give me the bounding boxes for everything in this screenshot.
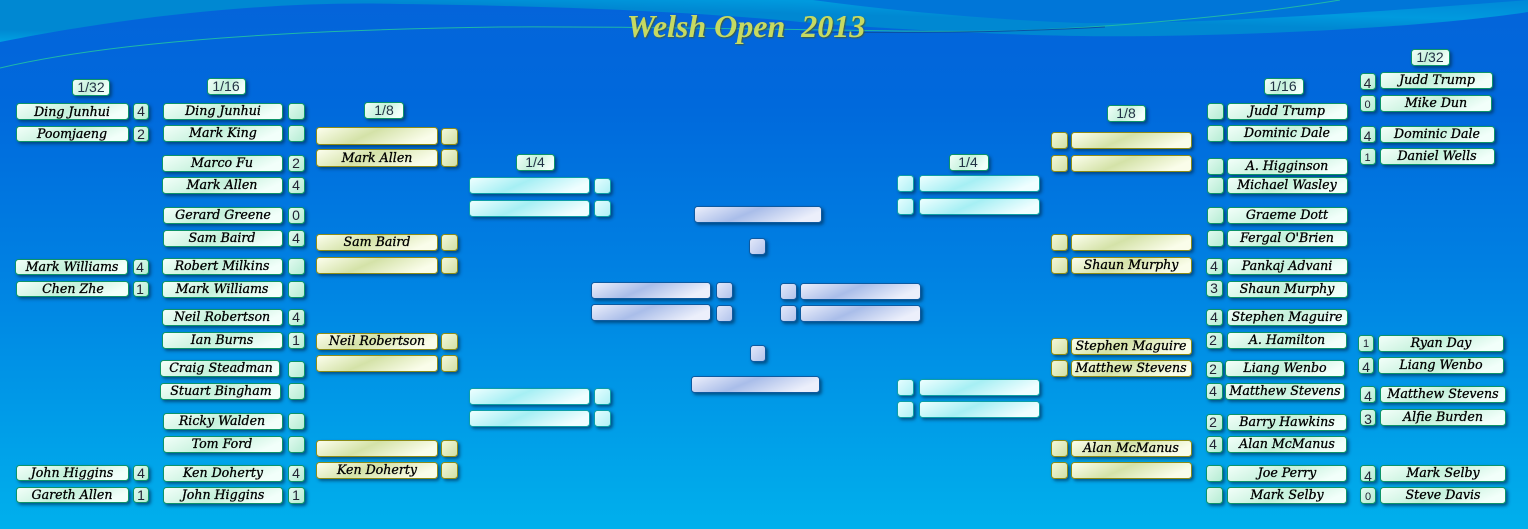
match row: Mark Allen (316, 150, 458, 166)
match row: John Higgins (16, 465, 148, 481)
match row: Matthew Stevens: Matthew Stevens (1074, 360, 1187, 375)
match row: Fergal O'Brien: Fergal O'Brien (1239, 230, 1334, 245)
match row: Ken Doherty (316, 462, 458, 478)
match row: Steve Davis: Steve Davis (1406, 487, 1481, 502)
match row: Liang Wenbo: 2 (1209, 361, 1217, 377)
panel: right 1/32 round (1358, 49, 1506, 504)
match row: Steve Davis (1360, 487, 1506, 504)
match row: Shaun Murphy: 3 (1210, 280, 1218, 296)
match row: Poomjaeng (16, 126, 148, 142)
match row: Barry Hawkins: Barry Hawkins (1238, 414, 1335, 429)
match row: Ian Burns: Ian Burns (190, 332, 254, 347)
match row: Matthew Stevens (1360, 386, 1506, 404)
match row: Ding Junhui: Ding Junhui (184, 103, 261, 118)
match row: Neil Robertson (316, 333, 458, 350)
empty slot (316, 128, 458, 144)
match row: Ian Burns (162, 332, 304, 348)
match row: Shaun Murphy: Shaun Murphy (1240, 281, 1335, 296)
match row: Mark Selby: Mark Selby (1249, 487, 1325, 502)
match row: Neil Robertson: Neil Robertson (173, 309, 270, 324)
match row: Dominic Dale: Dominic Dale (1393, 126, 1480, 141)
empty slot (470, 200, 610, 216)
heading: 1/4 right: 1/4 (958, 154, 978, 170)
match row: Liang Wenbo: 4 (1362, 359, 1370, 375)
match row: Poomjaeng: Poomjaeng (36, 126, 107, 141)
match row: Dominic Dale (1360, 126, 1494, 144)
heading: 1/8 right (1108, 105, 1146, 122)
match row: Sam Baird: 4 (292, 230, 300, 246)
empty slot (898, 198, 1040, 214)
match row: Mike Dun: Mike Dun (1404, 95, 1467, 110)
match row: Judd Trump (1208, 103, 1348, 120)
empty slot (898, 402, 1040, 418)
match row: Stuart Bingham (160, 383, 304, 400)
match row: Alan McManus: Alan McManus (1238, 436, 1335, 451)
heading: 1/32 right: 1/32 (1416, 49, 1444, 65)
semi-final right slot 2 (780, 306, 920, 322)
final score top (750, 238, 766, 254)
match row: Shaun Murphy: Shaun Murphy (1084, 257, 1179, 272)
match row: Ryan Day: Ryan Day (1410, 335, 1472, 350)
match row: Mark Williams: Mark Williams (175, 281, 269, 296)
match row: Barry Hawkins: 2 (1209, 414, 1217, 430)
match row: Alfie Burden: Alfie Burden (1402, 409, 1483, 424)
match row: Gareth Allen (16, 487, 148, 503)
match row: Mark King (164, 125, 304, 142)
match row: Joe Perry: Joe Perry (1255, 465, 1317, 480)
match row: Sam Baird (164, 230, 304, 246)
semi-final left slot 1 (592, 282, 732, 298)
match row: Chen Zhe (16, 281, 148, 297)
match row: Mark Selby: 4 (1364, 468, 1372, 484)
match row: Marco Fu: Marco Fu (190, 155, 253, 170)
match row: A. Hamilton (1206, 332, 1346, 348)
match row: Barry Hawkins (1206, 414, 1346, 430)
match row: Liang Wenbo (1206, 360, 1344, 378)
heading: 1/16 left (208, 78, 246, 94)
match row: Ding Junhui: 4 (137, 103, 145, 119)
match row: Pankaj Advani (1206, 258, 1348, 274)
panel: centre semi-finals and final (592, 206, 920, 392)
match row: Tom Ford (164, 436, 304, 452)
match row: Michael Wasley (1208, 177, 1348, 194)
match row: Neil Robertson: Neil Robertson (328, 333, 425, 348)
match row: Ian Burns: 1 (292, 332, 300, 348)
match row: Mark Allen: Mark Allen (341, 150, 412, 165)
empty slot (1052, 132, 1192, 148)
panel: left 1/4 round (470, 154, 610, 426)
match row: Judd Trump: Judd Trump (1396, 72, 1475, 87)
match row: Gerard Greene (164, 207, 304, 224)
empty slot (470, 178, 610, 194)
match row: Marco Fu (162, 155, 304, 172)
match row: Judd Trump: 4 (1364, 75, 1372, 91)
empty slot (898, 380, 1040, 396)
match row: A. Hamilton: A. Hamilton (1248, 332, 1325, 347)
panel: left 1/8 round (316, 102, 458, 478)
match row: Chen Zhe: Chen Zhe (42, 281, 104, 296)
heading: 1/8 right: 1/8 (1116, 105, 1136, 121)
match row: Ding Junhui (164, 103, 304, 120)
match row: Mike Dun (1360, 95, 1492, 112)
semi-final left slot 2 (592, 304, 732, 322)
match row: Dominic Dale: Dominic Dale (1243, 125, 1330, 140)
match row: John Higgins: 1 (292, 487, 300, 503)
match row: John Higgins: John Higgins (179, 487, 265, 502)
match row: Mark Allen (162, 177, 304, 194)
heading: 1/16 right (1264, 78, 1304, 94)
match row: Joe Perry (1206, 465, 1346, 482)
match row: Stuart Bingham: Stuart Bingham (170, 383, 272, 398)
match row: Daniel Wells: Daniel Wells (1396, 148, 1477, 163)
panel: right 1/4 round (898, 154, 1040, 418)
match row: Tom Ford: Tom Ford (192, 436, 252, 451)
match row: Mark Allen: 4 (292, 177, 300, 193)
match row: Steve Davis: 0 (1365, 491, 1371, 503)
final slot bottom (692, 376, 820, 392)
match row: Mark Selby: Mark Selby (1405, 465, 1481, 480)
empty slot (470, 410, 610, 426)
match row: Stephen Maguire: Stephen Maguire (1076, 338, 1186, 353)
match row: A. Higginson: A. Higginson (1245, 158, 1328, 173)
match row: Ding Junhui: Ding Junhui (33, 104, 110, 119)
empty slot (898, 176, 1040, 192)
match row: Mark Selby (1360, 465, 1506, 484)
match row: Sam Baird: Sam Baird (344, 234, 410, 249)
match row: Mike Dun: 0 (1364, 99, 1371, 111)
match row: Chen Zhe: 1 (136, 281, 144, 297)
match row: Shaun Murphy (1206, 280, 1348, 298)
panel: right 1/8 round (1052, 105, 1192, 478)
match row: Dominic Dale (1208, 125, 1348, 142)
empty slot (1052, 234, 1192, 250)
heading: 1/32 left: 1/32 (77, 79, 105, 95)
match row: Liang Wenbo (1358, 357, 1504, 375)
match row: Stephen Maguire: 4 (1210, 309, 1218, 325)
match row: Robert Milkins: Robert Milkins (174, 258, 270, 273)
match row: Matthew Stevens: 4 (1209, 383, 1217, 399)
heading: 1/32 right (1412, 49, 1450, 66)
match row: Daniel Wells: 1 (1364, 152, 1371, 164)
match row: John Higgins: 4 (137, 465, 145, 481)
match row: Neil Robertson: 4 (292, 309, 300, 325)
match row: Alan McManus (1052, 440, 1192, 456)
heading: 1/8 left (364, 102, 404, 118)
match row: Mark Williams: Mark Williams (25, 259, 119, 274)
match row: Liang Wenbo: Liang Wenbo (1398, 357, 1483, 372)
match row: John Higgins: John Higgins (28, 465, 114, 480)
match row: Mark Selby (1206, 487, 1346, 504)
heading: 1/4 left: 1/4 (525, 154, 545, 170)
match row: Shaun Murphy (1052, 257, 1192, 274)
match row: Alfie Burden (1360, 409, 1506, 427)
match row: Craig Steadman: Craig Steadman (169, 360, 273, 375)
match row: Mark Allen: Mark Allen (186, 177, 257, 192)
panel: left 1/16 round (160, 78, 304, 504)
empty slot (1052, 462, 1192, 478)
match row: Michael Wasley: Michael Wasley (1236, 177, 1338, 192)
match row: Ding Junhui (16, 103, 148, 120)
match row: A. Higginson (1208, 158, 1348, 174)
match row: Ricky Walden (164, 413, 304, 430)
match row: Sam Baird: Sam Baird (189, 230, 255, 245)
match row: Gerard Greene: Gerard Greene (175, 207, 271, 222)
match row: Fergal O'Brien (1208, 230, 1348, 246)
title: Welsh Open 2013 (627, 8, 865, 44)
match row: Alan McManus: Alan McManus (1082, 440, 1179, 455)
match row: A. Hamilton: 2 (1209, 332, 1217, 348)
semi-final right slot 1 (780, 284, 920, 300)
empty slot (316, 356, 458, 372)
match row: Poomjaeng: 2 (137, 126, 145, 142)
match row: Stephen Maguire: Stephen Maguire (1232, 309, 1342, 324)
heading: 1/4 left (516, 154, 554, 170)
empty slot (316, 440, 458, 456)
match row: Gareth Allen: 1 (137, 487, 145, 503)
match row: Ken Doherty (164, 465, 304, 482)
heading: 1/16 left: 1/16 (212, 78, 240, 94)
match row: Ken Doherty: Ken Doherty (182, 465, 264, 480)
match row: Ken Doherty: Ken Doherty (336, 462, 418, 477)
match row: John Higgins (164, 487, 304, 504)
match row: Mark King: Mark King (188, 125, 257, 140)
match row: Dominic Dale: 4 (1364, 128, 1372, 144)
match row: Mark Williams (16, 259, 148, 275)
match row: Graeme Dott: Graeme Dott (1246, 207, 1329, 222)
match row: Pankaj Advani: Pankaj Advani (1241, 258, 1332, 273)
match row: Gareth Allen: Gareth Allen (32, 487, 112, 502)
match row: Gerard Greene: 0 (292, 207, 300, 223)
match row: Alan McManus: 4 (1209, 436, 1217, 452)
match row: Matthew Stevens: Matthew Stevens (1228, 383, 1341, 398)
match row: Alan McManus (1206, 436, 1346, 452)
match row: Pankaj Advani: 4 (1210, 258, 1218, 274)
panel: left 1/32 round (16, 79, 148, 503)
match row: Judd Trump: Judd Trump (1246, 103, 1325, 118)
match row: Mark Williams (162, 281, 304, 298)
empty slot (316, 258, 458, 274)
final slot top (694, 206, 822, 222)
match row: Liang Wenbo: Liang Wenbo (1242, 360, 1327, 375)
match row: Matthew Stevens: Matthew Stevens (1386, 386, 1499, 401)
empty slot (470, 388, 610, 404)
match row: Graeme Dott (1208, 207, 1348, 224)
match row: Ken Doherty: 4 (292, 465, 300, 481)
match row: Matthew Stevens: 4 (1364, 388, 1372, 404)
final score bottom (750, 346, 766, 362)
match row: Mark Williams: 4 (136, 259, 144, 275)
match row: Robert Milkins (162, 258, 304, 274)
match row: Ryan Day: 1 (1363, 338, 1369, 350)
match row: Craig Steadman (160, 360, 304, 378)
match row: Neil Robertson (162, 309, 304, 326)
match row: Daniel Wells (1360, 148, 1494, 164)
match row: Ryan Day (1358, 335, 1504, 352)
heading: 1/4 right (950, 154, 988, 170)
match row: Judd Trump (1360, 72, 1492, 91)
heading: 1/16 right: 1/16 (1269, 78, 1297, 94)
heading: 1/8 left: 1/8 (374, 102, 394, 118)
match row: Alfie Burden: 3 (1364, 411, 1372, 427)
match row: Marco Fu: 2 (292, 155, 300, 171)
panel: right 1/16 round (1206, 78, 1348, 504)
empty slot (1052, 156, 1192, 172)
match row: Ricky Walden: Ricky Walden (178, 413, 265, 428)
match row: Sam Baird (316, 234, 458, 250)
